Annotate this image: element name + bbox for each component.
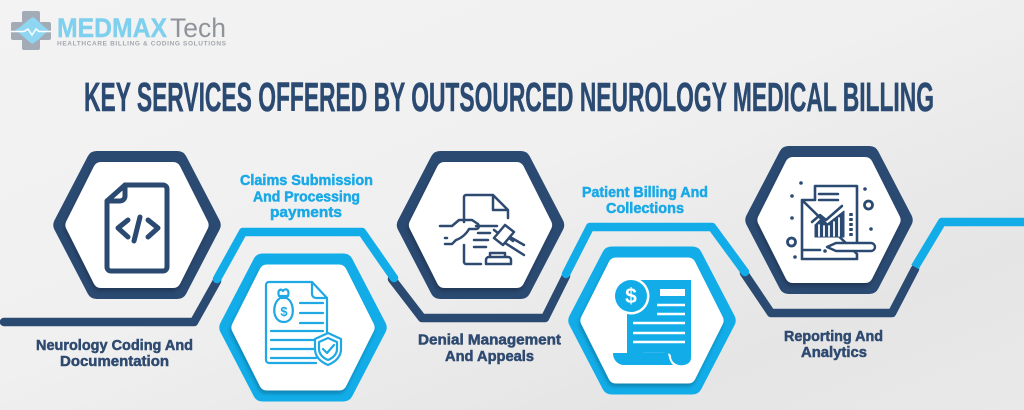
label [784, 329, 883, 361]
logo [11, 11, 227, 50]
icon: gavel and document [440, 195, 524, 264]
label: Documentation [60, 354, 169, 370]
connector line [4, 222, 1024, 322]
label: Claims Submission [240, 173, 373, 189]
icon: invoice with money bag and shield: $ [280, 304, 288, 319]
label: And Processing [253, 190, 360, 206]
panel: patient billing [578, 185, 726, 384]
panel: claims submission [229, 173, 377, 392]
icon: code document [107, 185, 167, 271]
logo tagline: HEALTHCARE BILLING & CODING SOLUTIONS [57, 40, 227, 48]
hexagon frame [407, 161, 554, 289]
label [36, 338, 193, 370]
icon: report with chart and pencil [788, 181, 875, 259]
label: payments [270, 205, 342, 221]
hexagon frame [755, 156, 903, 284]
panel: reporting and analytics [755, 156, 903, 361]
hexagon frame [229, 264, 377, 392]
icon: dollar bill scroll: $ [625, 285, 637, 308]
label: Reporting And [784, 329, 883, 345]
label [418, 332, 561, 365]
panel: denial management [407, 161, 561, 365]
label: Collections [606, 201, 684, 217]
icon: medical cross [11, 11, 51, 50]
icon: invoice with money bag and shield [266, 282, 341, 365]
label: And Appeals [445, 349, 534, 365]
label [240, 173, 373, 221]
hexagon frame [63, 161, 211, 289]
logo wordmark suffix: Tech [170, 13, 226, 43]
label: Neurology Coding And [36, 338, 193, 354]
label: Analytics [801, 345, 867, 361]
hexagon frame [578, 256, 726, 384]
logo wordmark: MEDMAX [57, 13, 167, 43]
label: Patient Billing And [582, 185, 708, 201]
panel: neurology coding [36, 161, 211, 370]
label [582, 185, 708, 217]
label: Denial Management [418, 332, 561, 348]
icon: dollar bill scroll [612, 278, 691, 365]
